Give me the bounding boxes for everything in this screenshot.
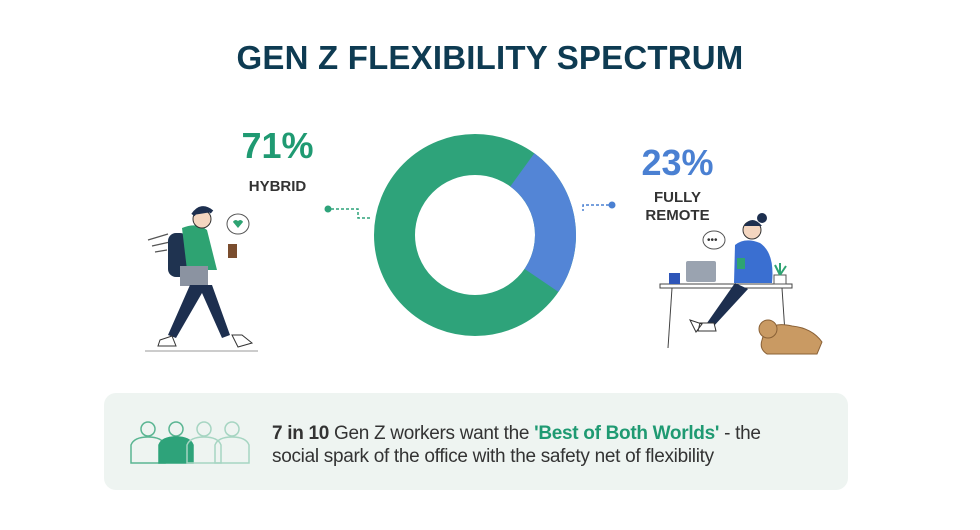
icon: people group <box>130 421 250 464</box>
illustration: remote worker with dog <box>660 213 822 354</box>
stat: fully remote: FULLY <box>654 189 701 206</box>
illustration: walking person <box>145 208 258 351</box>
stat: hybrid: 71% <box>241 125 314 166</box>
stat: hybrid: HYBRID <box>249 178 306 195</box>
illustration: remote worker with dog: ••• <box>707 235 718 246</box>
stat: hybrid <box>241 125 314 195</box>
callout panel <box>104 393 848 490</box>
stat: fully remote: REMOTE <box>645 207 710 224</box>
leader line: remote <box>583 202 616 211</box>
callout text: 7 in 10 Gen Z workers want the 'Best of Both Worlds' - the social spark of the office with the safety net of flexibility <box>272 423 761 467</box>
title: GEN Z FLEXIBILITY SPECTRUM <box>237 39 743 76</box>
stat: fully remote <box>641 142 714 224</box>
stat: fully remote: 23% <box>641 142 714 183</box>
leader line: hybrid <box>324 206 372 218</box>
